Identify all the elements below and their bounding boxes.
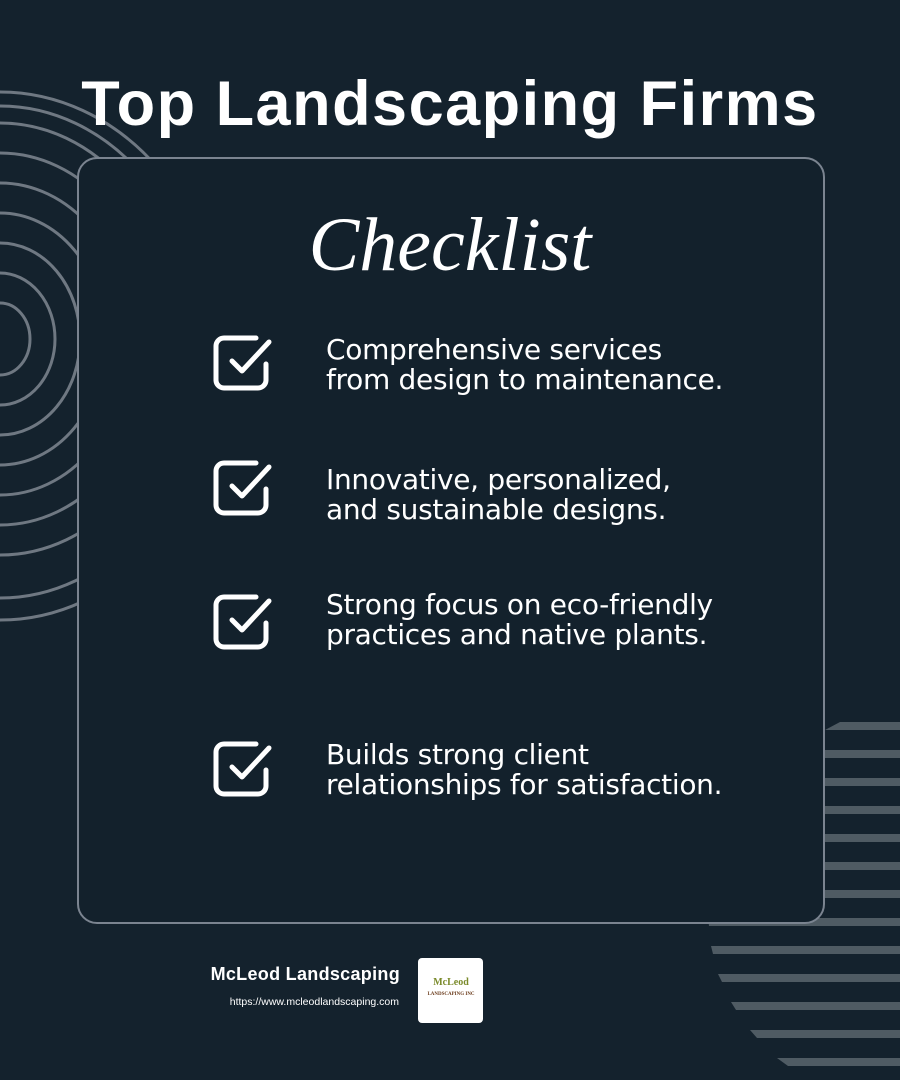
footer: url: https://www.mcleodlandscaping.com: [230, 996, 399, 1008]
footer: brand name: McLeod Landscaping: [211, 964, 400, 984]
text: item 2: Innovative, personalized,: [326, 463, 671, 496]
logo: McLeod: [433, 977, 469, 988]
logo: [418, 958, 483, 1023]
heading: Checklist: Checklist: [309, 203, 591, 287]
text: item 2: and sustainable designs.: [326, 493, 666, 526]
panel: checklist: [77, 157, 825, 924]
logo: LANDSCAPING INC: [427, 992, 475, 997]
icon: checkbox 4: [214, 742, 272, 796]
icon: checkbox 2: [214, 460, 272, 516]
text: item 3: practices and native plants.: [326, 618, 707, 651]
text: item 1: [326, 333, 723, 396]
icon: checkbox 3: [214, 594, 272, 650]
text: item 4: [326, 738, 722, 801]
text: item 3: Strong focus on eco-friendly: [326, 588, 713, 621]
text: item 2: [326, 463, 671, 526]
text: item 4: relationships for satisfaction.: [326, 768, 722, 801]
text: item 3: [326, 588, 713, 651]
icon: checkbox 1: [214, 336, 272, 390]
text: item 1: Comprehensive services: [326, 333, 662, 366]
title: Top Landscaping Firms: [81, 69, 819, 139]
text: item 1: from design to maintenance.: [326, 363, 723, 396]
text: item 4: Builds strong client: [326, 738, 589, 771]
